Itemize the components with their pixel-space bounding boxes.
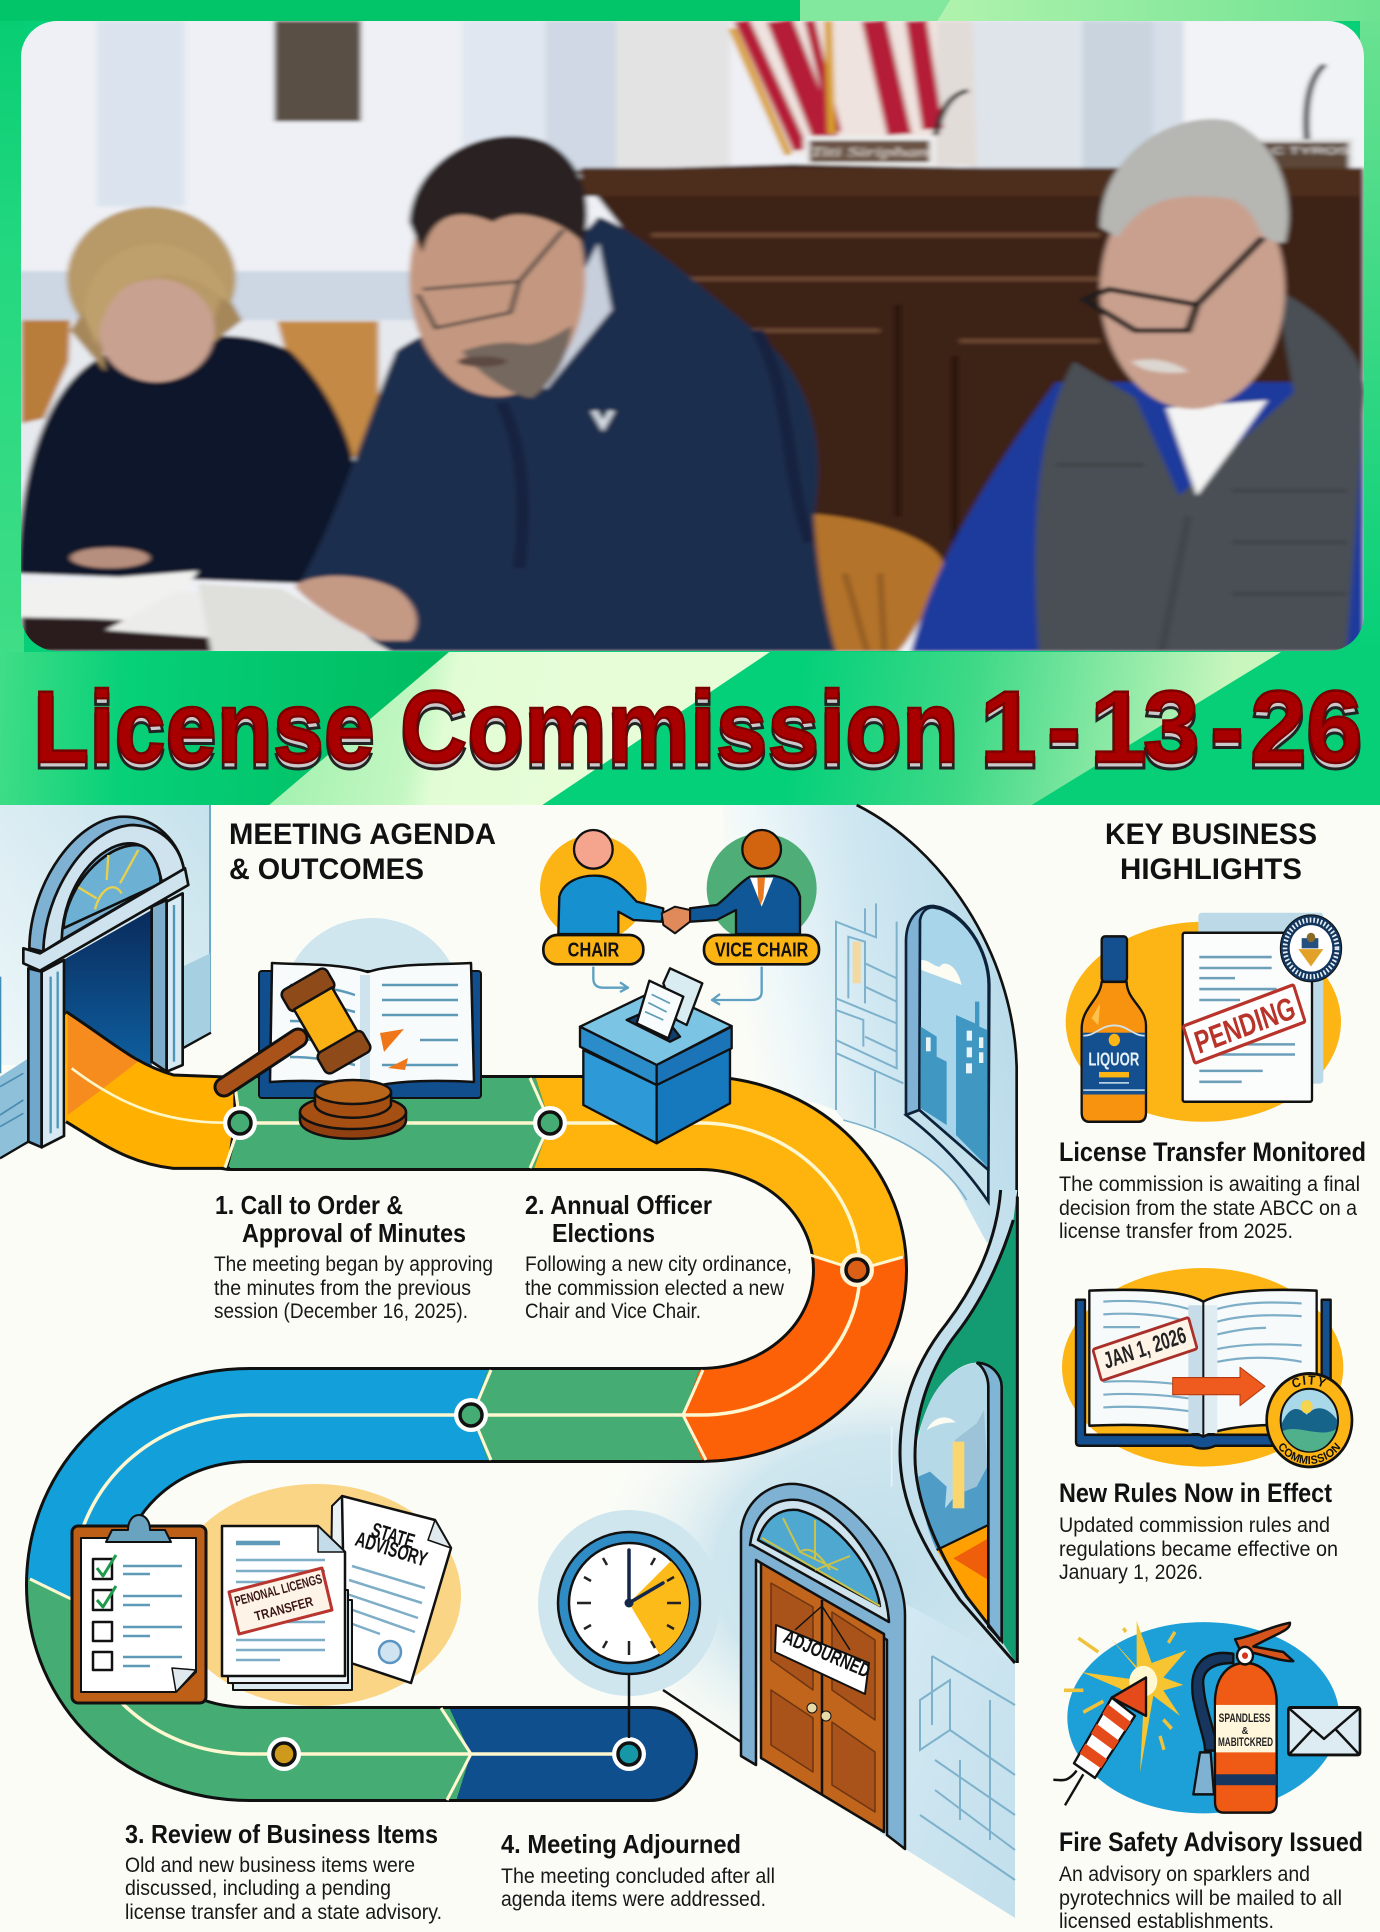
icon: liquor bottle and pending document: LIQUOR <box>1088 1049 1139 1070</box>
nameplate right <box>1254 138 1353 174</box>
closing door with Adjourned sign <box>741 1484 905 1849</box>
nameplate left <box>804 136 936 168</box>
icon: liquor bottle and pending document <box>1066 913 1342 1122</box>
highlight 2 text <box>1059 1478 1338 1584</box>
document <box>1183 933 1312 1102</box>
vice chair figure <box>690 830 800 934</box>
upper right wall with window <box>723 805 1017 1243</box>
meeting photograph <box>0 0 1380 671</box>
plaque <box>275 21 361 121</box>
clip <box>106 1515 171 1542</box>
highlight 3 text: pyrotechnics will be mailed to all <box>1059 1886 1342 1910</box>
title lettering: Commission <box>400 670 959 784</box>
vice chair pill <box>704 935 819 964</box>
road start section <box>66 1012 240 1168</box>
door jambs <box>28 893 183 1147</box>
door arch frame <box>741 1484 905 1849</box>
green header background <box>0 0 1380 806</box>
icon: book with gavel <box>224 918 481 1139</box>
title bevel shadow: Commission <box>400 676 959 790</box>
curved band <box>900 1190 1017 1663</box>
gavel head <box>279 966 373 1076</box>
sparks <box>380 1029 408 1070</box>
heading: key business highlights: HIGHLIGHTS <box>1120 853 1302 886</box>
step 2 text: the commission elected a new <box>525 1277 785 1300</box>
window sky <box>917 1363 988 1627</box>
chair pill: CHAIR <box>568 940 620 962</box>
wall <box>0 0 1380 671</box>
city commission seal <box>1265 1372 1354 1468</box>
step 3 text: discussed, including a pending <box>125 1877 391 1900</box>
step 1 text: The meeting began by approving <box>214 1253 493 1276</box>
nameplate left: Titi Siriphan <box>810 145 929 160</box>
step 1 text: the minutes from the previous <box>214 1277 471 1300</box>
door panels <box>761 1563 884 1832</box>
icon: firework, extinguisher and envelope: & <box>1242 1725 1248 1737</box>
door opening <box>63 910 152 1067</box>
icon: rule book and city seal <box>1062 1268 1354 1468</box>
papers on table <box>21 571 392 652</box>
right S-curve frame with green wall and second window <box>892 1190 1017 1663</box>
step 2 text <box>525 1190 792 1323</box>
seal <box>1280 915 1342 982</box>
title lettering: 1-13-26 <box>980 670 1363 784</box>
icon: handshake and ballot box <box>540 830 819 1143</box>
title lettering: License <box>33 670 375 784</box>
chair figure <box>558 830 663 934</box>
man on the right <box>911 119 1366 652</box>
date stamp: JAN 1, 2026 <box>1101 1322 1189 1374</box>
step 1 text: session (December 16, 2025). <box>214 1300 468 1323</box>
adjourned sign: ADJOURNED <box>780 1626 873 1683</box>
pending transfer sheet stack: PENONAL LICENGS <box>233 1571 324 1609</box>
yellow circle behind documents <box>171 1484 461 1706</box>
ballot box <box>580 968 732 1143</box>
icon: firework, extinguisher and envelope: SPANDLESS <box>1219 1711 1270 1725</box>
step 2 text: 2. Annual Officer <box>525 1190 712 1220</box>
winding agenda road <box>30 1078 903 1800</box>
highlight 3 text <box>1059 1827 1363 1932</box>
state advisory sheet: STATE <box>369 1519 417 1554</box>
hands <box>662 907 690 933</box>
step 1 text <box>214 1190 493 1323</box>
step 3 text: license transfer and a state advisory. <box>125 1901 442 1924</box>
step 2 text: Following a new city ordinance, <box>525 1253 792 1276</box>
desk <box>576 164 1364 573</box>
title lettering <box>33 670 1363 784</box>
window <box>906 906 989 1170</box>
title bevel shadow: 1-13-26 <box>980 676 1363 790</box>
chairs <box>21 320 943 652</box>
extinguisher <box>1192 1623 1293 1813</box>
highlight 2 text: Updated commission rules and <box>1059 1513 1330 1537</box>
step 2 text: Chair and Vice Chair. <box>525 1300 701 1323</box>
heading: key business highlights: KEY BUSINESS <box>1105 818 1317 851</box>
highlight 2 text: January 1, 2026. <box>1059 1560 1203 1584</box>
step 1 text: 1. Call to Order & <box>215 1190 403 1220</box>
step 2 text: Elections <box>552 1218 655 1248</box>
vice chair pill: VICE CHAIR <box>715 940 809 962</box>
lower wall shading around closing door <box>649 1376 1015 1918</box>
state advisory sheet: ADVISORY <box>353 1528 430 1571</box>
gavel handle <box>224 1038 298 1087</box>
step 4 text: agenda items were addressed. <box>501 1888 766 1911</box>
date stamp <box>1093 1317 1197 1381</box>
chair pill <box>543 935 643 964</box>
step 4 text: The meeting concluded after all <box>501 1865 775 1888</box>
heading: key business highlights <box>1105 818 1317 886</box>
arrows into box <box>593 967 762 1005</box>
highlight 3 text: An advisory on sparklers and <box>1059 1862 1310 1886</box>
pending stamp: PENDING <box>1190 989 1299 1061</box>
city commission seal: COMMISSION <box>1279 1442 1340 1464</box>
burst <box>1064 1621 1187 1772</box>
road milestone nodes <box>223 1106 874 1771</box>
step 3 text: 3. Review of Business Items <box>125 1819 438 1849</box>
pending transfer sheet stack: TRANSFER <box>253 1594 315 1624</box>
step 4 text: 4. Meeting Adjourned <box>501 1829 741 1859</box>
icon: clock <box>538 1510 720 1738</box>
flag <box>730 21 977 165</box>
window towers <box>921 1002 987 1167</box>
icon: firework, extinguisher and envelope <box>1053 1621 1360 1813</box>
icon: firework, extinguisher and envelope: MABITCKRED <box>1218 1737 1273 1749</box>
step 4 text <box>501 1829 775 1911</box>
arrow <box>1173 1367 1265 1406</box>
highlight 1 text: decision from the state ABCC on a <box>1059 1196 1357 1220</box>
heading: meeting agenda and outcomes: MEETING AGENDA <box>229 818 496 851</box>
heading: meeting agenda and outcomes: & OUTCOMES <box>229 853 424 886</box>
highlight 2 text: regulations became effective on <box>1059 1537 1338 1561</box>
highlight 1 text <box>1059 1137 1366 1243</box>
step 3 text <box>125 1819 442 1924</box>
bottle <box>1082 936 1146 1122</box>
microphones <box>936 65 1325 139</box>
man in the middle <box>295 136 836 652</box>
window cloud <box>921 960 962 985</box>
highlight 2 text: New Rules Now in Effect <box>1059 1478 1332 1508</box>
building line sketch <box>836 903 903 1128</box>
blueprint lines on lower right wall <box>920 1656 1015 1880</box>
adjourned sign <box>775 1625 873 1694</box>
wall base line <box>663 1690 741 1742</box>
sound block <box>300 1080 406 1139</box>
title bevel shadow <box>33 676 1363 790</box>
green panel <box>916 1197 1016 1663</box>
icon: clipboard checklist <box>72 1515 206 1703</box>
heading: meeting agenda and outcomes <box>229 818 496 886</box>
pending transfer sheet stack <box>222 1526 352 1690</box>
title bevel shadow: License <box>33 676 375 790</box>
step 3 text: Old and new business items were <box>125 1854 415 1877</box>
icon: business documents <box>222 1496 451 1690</box>
lower panel background <box>0 805 1380 1932</box>
checkboxes <box>93 1559 112 1670</box>
nameplate right: C TYROS <box>1272 145 1350 157</box>
envelope <box>1288 1707 1360 1755</box>
woman <box>18 207 357 584</box>
title <box>33 670 1363 790</box>
book <box>1076 1290 1331 1449</box>
step 1 text: Approval of Minutes <box>242 1218 466 1248</box>
city commission seal: CITY <box>1292 1375 1326 1388</box>
left wall and entrance door <box>0 805 211 1158</box>
rocket <box>1074 1678 1146 1778</box>
state advisory sheet <box>330 1496 451 1683</box>
highlight 1 text: license transfer from 2025. <box>1059 1219 1293 1243</box>
highlight 1 text: The commission is awaiting a final <box>1059 1172 1360 1196</box>
arch <box>23 817 188 971</box>
